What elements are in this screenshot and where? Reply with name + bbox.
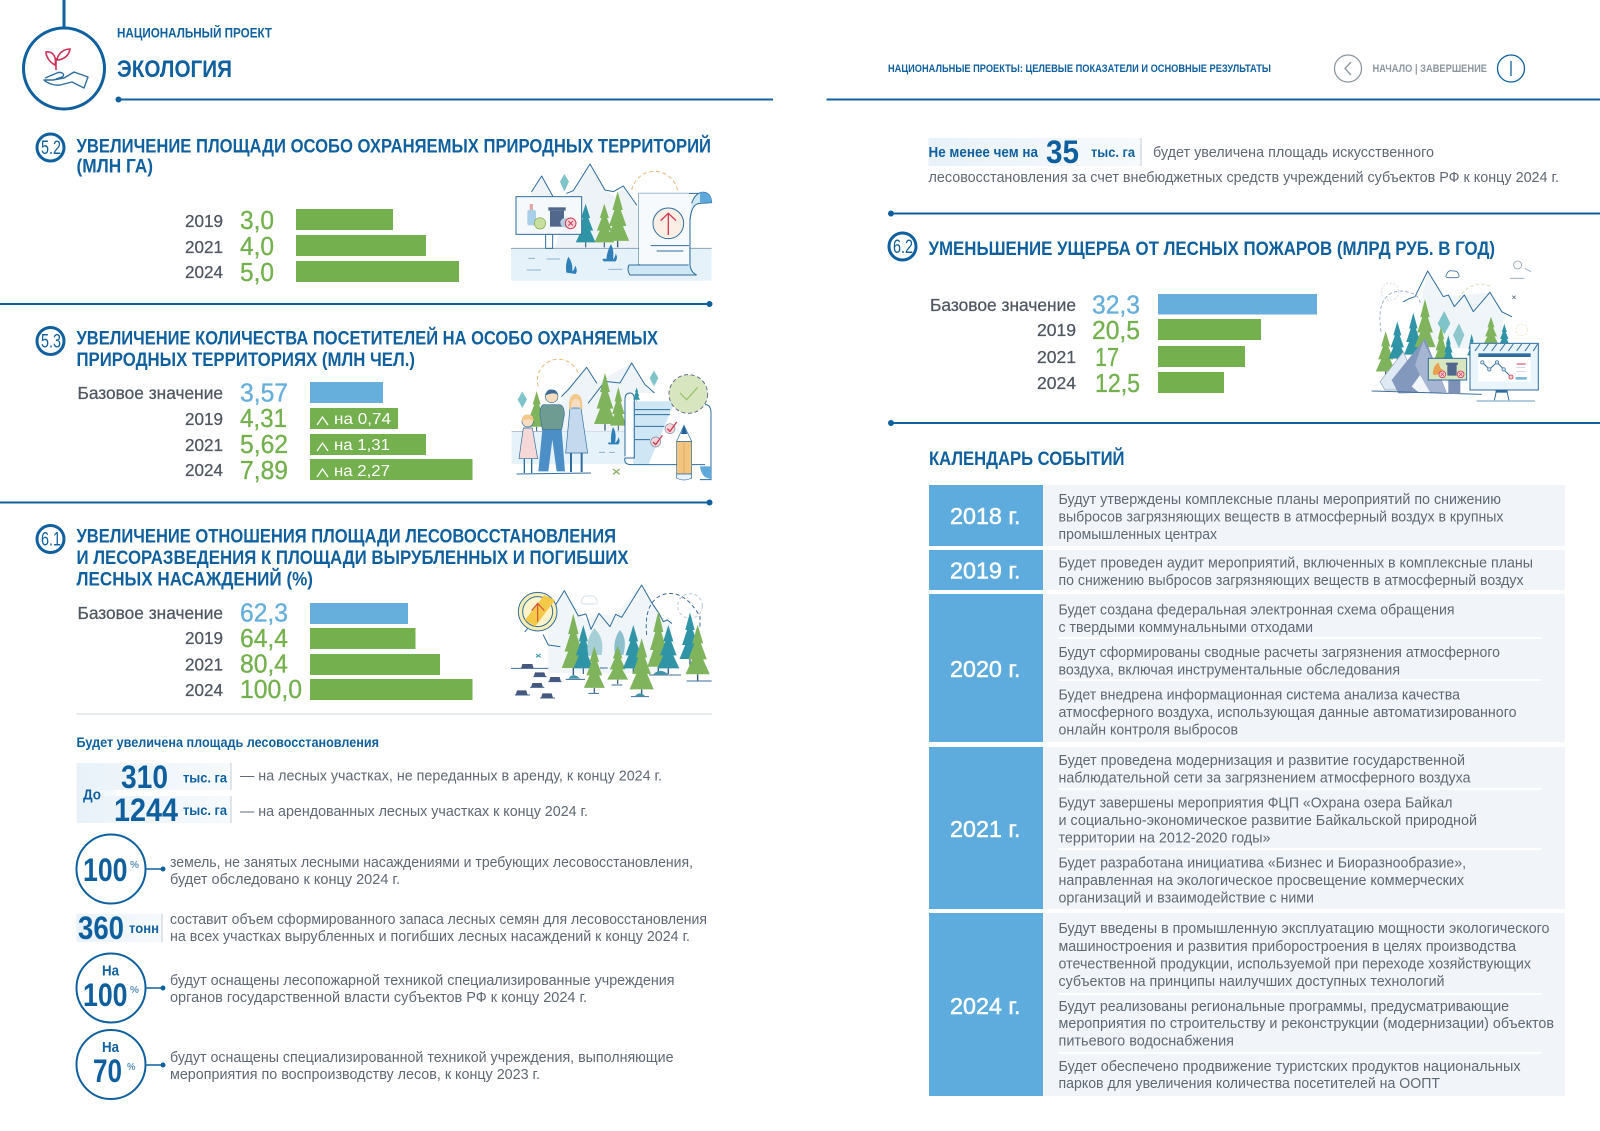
icon: plant in hand: [24, 0, 104, 109]
heading: (МЛН ГА): [76, 156, 153, 178]
calendar row: 2024: парков для увеличения количества посетителей на ООПТ: [1058, 1075, 1440, 1092]
calendar row: 2021: территории на 2012-2020 годы»: [1058, 830, 1270, 846]
heading: ПРИРОДНЫХ ТЕРРИТОРИЯХ (МЛН ЧЕЛ.): [76, 350, 415, 371]
icon: end button: [1498, 55, 1524, 82]
panel: 5.3 visitors: [0, 328, 712, 506]
stat: 100% of lands surveyed: будет обследовано к концу 2024 г.: [170, 871, 400, 888]
stat: 360 tons of seeds: тонн: [129, 920, 159, 936]
bar chart: 2021: [185, 654, 223, 674]
stat: 70% specialised equipment: На: [102, 1039, 120, 1056]
badge 5.3: [37, 328, 64, 354]
badge 5.2: 5.2: [41, 138, 61, 159]
panel: reforestation details: [76, 734, 707, 1099]
badge 6.2: 6.2: [893, 237, 913, 258]
subheading: Будет увеличена площадь лесовосстановления: [76, 734, 379, 750]
calendar row: 2024: мероприятия по строительству и реконструкции (модернизации) объектов: [1058, 1015, 1554, 1032]
calendar row: 2020: с твердыми коммунальными отходами: [1058, 619, 1313, 636]
calendar heading: КАЛЕНДАРЬ СОБЫТИЙ: [929, 448, 1124, 470]
bar chart: Базовое значение: [930, 295, 1076, 315]
stat: 100% fire equipment: органов государственной власти субъектов РФ к концу 2024 г.: [170, 989, 587, 1006]
bar chart: 100,0: [240, 674, 302, 704]
calendar row: 2024: Будут реализованы региональные программы, предусматривающие: [1058, 998, 1509, 1015]
stat: 70% specialised equipment: %: [127, 1062, 136, 1073]
badge 5.3: 5.3: [41, 332, 61, 352]
stat: 100% of lands surveyed: 100: [83, 852, 128, 888]
stat: 100% fire equipment: будут оснащены лесопожарной техникой специализированные учреждения: [170, 972, 674, 989]
calendar row: 2024: питьевого водоснабжения: [1058, 1032, 1234, 1050]
illustration: family and checklist: [512, 359, 711, 480]
calendar row: 2020: Будет создана федеральная электронная схема обращения: [1058, 602, 1454, 618]
stat: up to 310 and 1244 thousand ha: тыс. га: [183, 802, 227, 818]
icon: back button: [1334, 55, 1362, 82]
calendar row: 2024: Будет обеспечено продвижение туристских продуктов национальных: [1058, 1058, 1521, 1075]
page header: left: [24, 0, 773, 109]
heading: [76, 328, 658, 371]
bar chart: 2021: [185, 237, 223, 257]
bar chart: 62,3: [240, 598, 288, 628]
calendar row: 2019: [929, 550, 1565, 590]
stat: 360 tons of seeds: составит объем сформированного запаса лесных семян для лесовосстановления: [170, 911, 707, 928]
stat: 100% fire equipment: [76, 954, 674, 1022]
heading: ЛЕСНЫХ НАСАЖДЕНИЙ (%): [76, 568, 313, 590]
stat: 70% specialised equipment: будут оснащены специализированной техникой учреждения, выполняющие: [170, 1049, 674, 1066]
stat: up to 310 and 1244 thousand ha: 1244: [114, 792, 178, 828]
calendar row: 2024: субъектов на принципы наилучших доступных технологий: [1058, 973, 1444, 990]
stat: up to 310 and 1244 thousand ha: — на арендованных лесных участках к концу 2024 г.: [240, 803, 588, 820]
stat: 100% of lands surveyed: земель, не занятых лесными насаждениями и требующих лесовосстановления,: [170, 854, 693, 871]
badge 6.2: [889, 233, 916, 260]
calendar row: 2021: направленная на экологическое просвещение коммерческих: [1058, 872, 1464, 889]
calendar row: 2021: Будет проведена модернизация и развитие государственной: [1058, 752, 1465, 769]
calendar row: 2021: [929, 747, 1565, 909]
callout: at least 35 thousand ha: лесовосстановления за счет внебюджетных средств учреждений субъектов РФ к концу 2024 г.: [928, 169, 1559, 186]
bar chart: [185, 205, 459, 287]
calendar row: 2018: Будут утверждены комплексные планы мероприятий по снижению: [1058, 491, 1501, 508]
bar chart: на 2,27: [334, 463, 390, 480]
stat: 70% specialised equipment: мероприятия по воспроизводству лесов, к концу 2023 г.: [170, 1066, 540, 1083]
bar chart: 2019: [1037, 320, 1076, 340]
bar chart: 2024: [185, 680, 223, 700]
bar chart: 12,5: [1095, 368, 1140, 398]
calendar row: 2018: [929, 485, 1565, 546]
calendar row: 2020: 2020 г.: [950, 656, 1020, 682]
bar chart: 7,89: [240, 455, 288, 485]
badge 5.2: [37, 134, 64, 161]
bar chart: Базовое значение: [78, 383, 223, 403]
badge 6.1: [37, 526, 64, 552]
calendar row: 2019: Будет проведен аудит мероприятий, включенных в комплексные планы: [1058, 554, 1533, 572]
calendar row: 2021: организаций и взаимодействие с ними: [1058, 890, 1314, 906]
heading: УВЕЛИЧЕНИЕ ПЛОЩАДИ ОСОБО ОХРАНЯЕМЫХ ПРИРОДНЫХ ТЕРРИТОРИЙ: [76, 136, 711, 158]
calendar row: 2024: отечественной продукции, используемой при переходе хозяйствующих: [1058, 956, 1531, 972]
calendar row: 2018: промышленных центрах: [1058, 526, 1217, 543]
bar chart: 2019: [185, 409, 223, 429]
calendar row: 2021: 2021 г.: [950, 816, 1020, 842]
bar chart: 2024: [185, 460, 223, 480]
calendar row: 2020: [929, 594, 1565, 742]
calendar row: 2018: выбросов загрязняющих веществ в атмосферный воздух в крупных: [1058, 508, 1504, 526]
bar chart: 5,0: [240, 257, 274, 287]
stat: up to 310 and 1244 thousand ha: 310: [121, 759, 168, 795]
stat: 70% specialised equipment: 70: [93, 1053, 122, 1089]
calendar row: 2020: воздуха, включая инструментальные обследования: [1058, 662, 1400, 678]
bar chart: 3,0: [240, 205, 274, 235]
calendar row: 2021: Будут завершены мероприятия ФЦП «Охрана озера Байкал: [1058, 794, 1452, 812]
calendar row: 2019: 2019 г.: [950, 558, 1020, 584]
bar chart: 2019: [185, 628, 223, 648]
page header: right: [826, 55, 1600, 100]
bar chart: 2021: [1037, 347, 1076, 367]
header label: НАЦИОНАЛЬНЫЙ ПРОЕКТ: [117, 26, 273, 40]
bar chart: 2021: [185, 435, 223, 455]
stat: up to 310 and 1244 thousand ha: [76, 759, 662, 828]
bar chart: 17: [1095, 342, 1119, 372]
calendar row: 2024: 2024 г.: [950, 993, 1020, 1019]
illustration: forest camp and monitor: [1372, 261, 1538, 401]
panel: 5.2 protected territories: [0, 134, 712, 307]
calendar row: 2024: [929, 913, 1565, 1096]
stat: 70% specialised equipment: [76, 1030, 674, 1099]
stat: up to 310 and 1244 thousand ha: До: [83, 786, 101, 804]
callout: at least 35 thousand ha: Не менее чем на: [928, 144, 1039, 161]
panel: 6.1 reforestation ratio: [37, 526, 712, 714]
calendar row: 2020: онлайн контроля выбросов: [1058, 722, 1238, 738]
bar chart: 2024: [185, 262, 223, 282]
bar chart: 20,5: [1092, 315, 1140, 345]
heading: УМЕНЬШЕНИЕ УЩЕРБА ОТ ЛЕСНЫХ ПОЖАРОВ (МЛРД РУБ. В ГОД): [928, 239, 1495, 260]
calendar row: 2020: Будет внедрена информационная система анализа качества: [1058, 686, 1461, 704]
bar chart: 2024: [1037, 373, 1076, 393]
page title: ЭКОЛОГИЯ: [117, 56, 232, 83]
bar chart: 4,31: [240, 403, 287, 433]
bar chart: 2019: [185, 211, 223, 231]
calendar row: 2018: 2018 г.: [950, 503, 1020, 529]
stat: 360 tons of seeds: [76, 910, 707, 946]
bar chart: 80,4: [240, 648, 288, 678]
callout: at least 35 thousand ha: [888, 134, 1600, 216]
stat: 360 tons of seeds: 360: [78, 910, 124, 946]
stat: up to 310 and 1244 thousand ha: тыс. га: [183, 770, 227, 786]
calendar row: 2021: наблюдательной сети за загрязнением атмосферного воздуха: [1058, 770, 1471, 786]
panel: 6.2 forest fire damage: [888, 233, 1600, 426]
bar chart: [78, 598, 472, 704]
stat: 360 tons of seeds: на всех участках вырубленных и погибших лесных насаждений к концу 2024 г.: [170, 928, 690, 945]
callout: at least 35 thousand ha: тыс. га: [1091, 144, 1135, 160]
bar chart: Базовое значение: [78, 603, 223, 623]
illustration: billboard and document: [511, 164, 712, 281]
navigation label: НАЧАЛО | ЗАВЕРШЕНИЕ: [1372, 63, 1487, 75]
heading: УВЕЛИЧЕНИЕ КОЛИЧЕСТВА ПОСЕТИТЕЛЕЙ НА ОСОБО ОХРАНЯЕМЫХ: [76, 328, 658, 350]
heading: [76, 526, 629, 590]
stat: 100% fire equipment: 100: [83, 977, 128, 1013]
bar chart: 3,57: [240, 378, 288, 408]
calendar row: 2021: Будет разработана инициатива «Бизнес и Биоразнообразие»,: [1058, 854, 1466, 872]
calendar row: 2021: и социально-экономическое развитие Байкальской природной: [1058, 812, 1477, 829]
calendar row: 2024: Будут введены в промышленную эксплуатацию мощности экологического: [1058, 920, 1550, 937]
bar chart: на 0,74: [334, 411, 391, 428]
calendar row: 2020: атмосферного воздуха, использующая данные автоматизированного: [1058, 704, 1516, 721]
stat: 100% fire equipment: На: [102, 962, 120, 980]
stat: 100% of lands surveyed: %: [130, 860, 139, 871]
callout: at least 35 thousand ha: 35: [1046, 134, 1079, 170]
calendar row: 2019: по снижению выбросов загрязняющих веществ в атмосферный воздух: [1058, 572, 1524, 589]
bar chart: [78, 378, 472, 485]
callout: at least 35 thousand ha: будет увеличена площадь искусственного: [1153, 144, 1434, 161]
bar chart: 5,62: [240, 429, 288, 459]
badge 6.1: 6.1: [41, 530, 61, 550]
bar chart: на 1,31: [334, 437, 390, 454]
illustration: forest with growth medal: [511, 585, 712, 698]
bar chart: 32,3: [1092, 290, 1140, 320]
calendar row: 2024: машиностроения и развития приборостроения в целях производства: [1058, 938, 1517, 955]
heading: И ЛЕСОРАЗВЕДЕНИЯ К ПЛОЩАДИ ВЫРУБЛЕННЫХ И ПОГИБШИХ: [76, 548, 629, 569]
stat: 100% of lands surveyed: [76, 834, 693, 904]
bar chart: [930, 290, 1317, 398]
stat: up to 310 and 1244 thousand ha: — на лесных участках, не переданных в аренду, к концу 2024 г.: [240, 768, 662, 784]
stat: 100% fire equipment: %: [130, 985, 139, 996]
bar chart: 4,0: [240, 231, 274, 261]
heading: УВЕЛИЧЕНИЕ ОТНОШЕНИЯ ПЛОЩАДИ ЛЕСОВОССТАНОВЛЕНИЯ: [76, 526, 616, 548]
calendar row: 2020: Будут сформированы сводные расчеты загрязнения атмосферного: [1058, 644, 1500, 661]
panel: calendar of events: [929, 448, 1565, 1096]
bar chart: 64,4: [240, 623, 288, 653]
heading: [76, 136, 711, 178]
running title: НАЦИОНАЛЬНЫЕ ПРОЕКТЫ: ЦЕЛЕВЫЕ ПОКАЗАТЕЛИ И ОСНОВНЫЕ РЕЗУЛЬТАТЫ: [888, 63, 1271, 75]
